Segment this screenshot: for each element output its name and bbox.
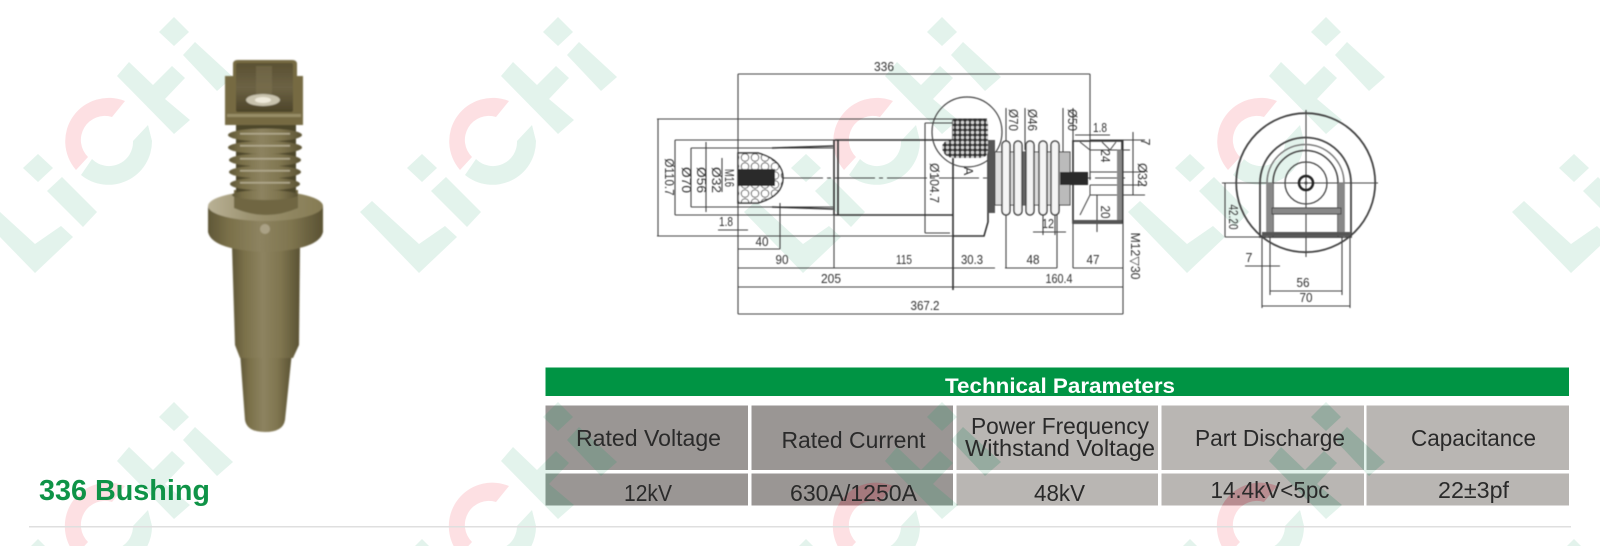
detail circle A (932, 97, 1002, 176)
dimension labels: 1.8 (719, 215, 733, 229)
dimension labels: 336 (874, 60, 894, 74)
dimension labels: 90 (776, 253, 789, 267)
threaded insert at left end (738, 153, 783, 203)
dimension labels (662, 60, 1152, 313)
drawing: end view of bushing with dimensions: 70 (1300, 291, 1313, 305)
table header labels: Withstand Voltage (965, 435, 1155, 461)
table header labels: Rated Current (782, 427, 926, 453)
table values: 48kV (1034, 480, 1086, 506)
dimension labels: 367.2 (910, 299, 940, 313)
dimension labels: Ø56 (694, 167, 708, 193)
dimension lines: overall lengths and diameters (657, 74, 1145, 314)
dimension labels: M16 (722, 169, 736, 187)
table header labels: Rated Voltage (576, 425, 721, 451)
dimension labels: 47 (1086, 253, 1100, 267)
dimension labels: 30.3 (961, 253, 983, 267)
body outline (772, 120, 988, 290)
table values (624, 477, 1510, 506)
dimension labels: 12 (1042, 217, 1054, 231)
dimension labels: 1.8 (1093, 121, 1107, 135)
dimension labels: 7 (1138, 139, 1152, 146)
dimension labels: Ø70 (1006, 109, 1020, 131)
dimension labels: 205 (821, 272, 841, 286)
table values: 22±3pf (1438, 477, 1510, 503)
table values: 14.4kV<5pc (1210, 477, 1330, 503)
dimension labels: 48 (1026, 253, 1040, 267)
dimension labels: Ø46 (1025, 109, 1039, 131)
table header labels: Power Frequency (971, 413, 1149, 439)
table title bar: Technical Parameters (945, 375, 1175, 398)
dimension labels: Ø110.7 (662, 158, 676, 196)
dimension labels: 20 (1098, 206, 1112, 219)
dimension labels: Ø32 (709, 167, 723, 193)
dimension labels: M12▽30 (1128, 232, 1142, 280)
dimension labels: Ø50 (1065, 109, 1079, 131)
dimension labels: 24 (1098, 150, 1112, 163)
drawing: end view of bushing with dimensions: 7 (1246, 251, 1253, 265)
dimension labels: Ø104.7 (927, 163, 941, 203)
dimension labels: 115 (896, 253, 912, 267)
dimension labels: 40 (756, 235, 769, 249)
drawing: end view of bushing with dimensions: 42.20 (1226, 204, 1240, 230)
product photo: bushing (208, 60, 323, 432)
table header labels: Part Discharge (1195, 425, 1345, 451)
drawing: side view of bushing with dimensions (657, 60, 1152, 314)
dimension labels: 160.4 (1046, 272, 1073, 286)
table header labels (576, 413, 1536, 461)
dimension labels: Ø70 (679, 167, 693, 193)
dimension labels: Ø32 (1135, 163, 1149, 187)
watermark showing through table (546, 406, 1385, 506)
table header labels: Capacitance (1411, 425, 1536, 451)
drawing: end view of bushing with dimensions: 56 (1296, 276, 1310, 290)
insulator sheds (988, 140, 1070, 215)
detail circle A: A (961, 167, 975, 176)
centre line (783, 177, 1125, 179)
table values: 630A/1250A (790, 480, 918, 506)
table: technical parameters (546, 368, 1569, 506)
table values: 12kV (624, 480, 673, 506)
drawing: end view of bushing with dimensions (1222, 110, 1378, 308)
table cell backgrounds (546, 406, 1569, 506)
right terminal (1060, 141, 1122, 224)
table title bar (546, 368, 1569, 398)
heading: product name: 336 Bushing (39, 475, 210, 507)
